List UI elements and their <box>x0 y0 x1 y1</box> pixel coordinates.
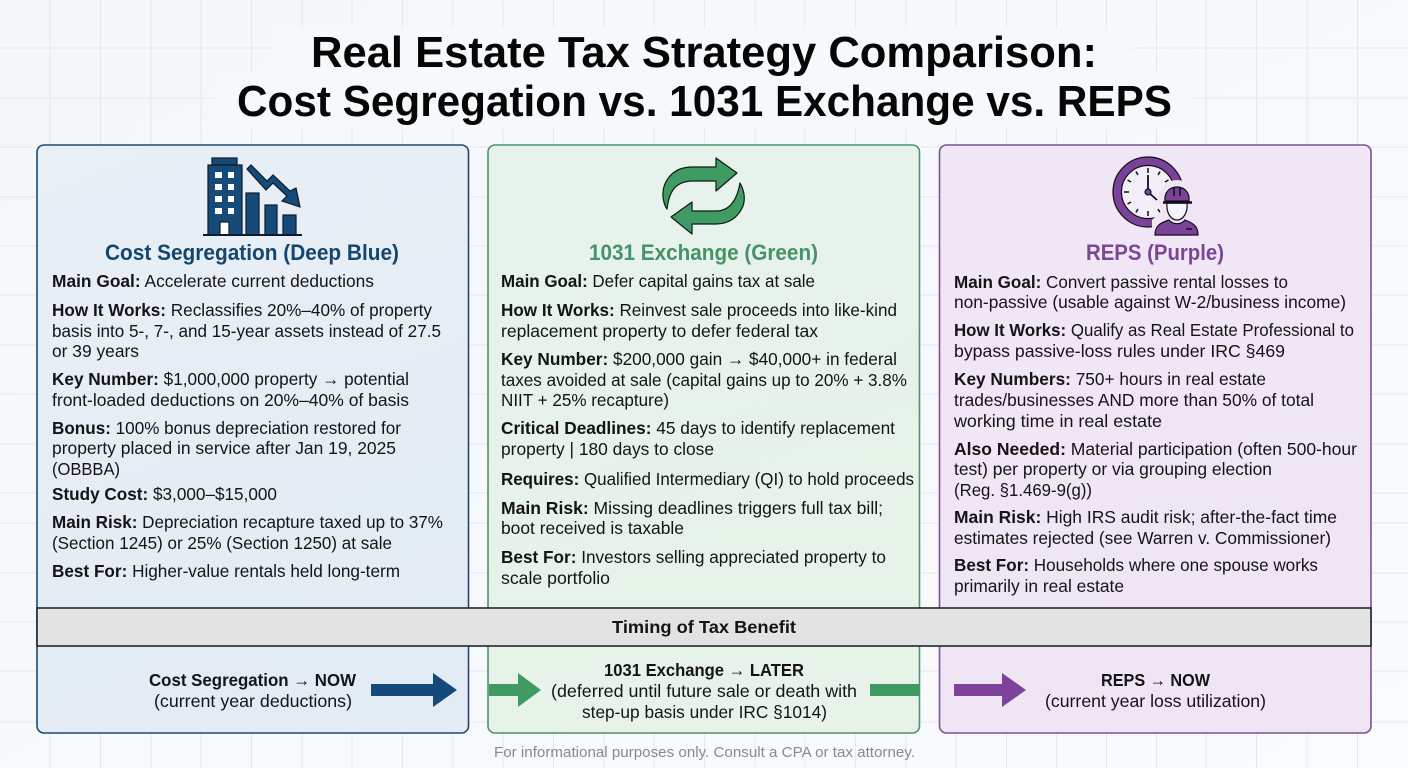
text: how it works: How It Works: Reclassifies 20%–40% of property <box>52 300 432 320</box>
arrow: cost segregation now <box>371 673 457 707</box>
text: main risk: boot received is taxable <box>501 518 684 538</box>
title: Real Estate Tax Strategy Comparison: <box>311 28 1097 77</box>
text: bonus: Bonus: 100% bonus depreciation restored for <box>52 418 401 438</box>
text: main risk: Main Risk: Missing deadlines triggers full tax bill; <box>501 498 883 518</box>
text: main risk <box>954 507 1337 548</box>
timing: cost segregation: Cost Segregation → NOW <box>149 670 356 690</box>
timing: reps <box>1045 670 1266 711</box>
timing: reps: (current year loss utilization) <box>1045 691 1266 711</box>
title <box>237 28 1172 126</box>
text: key number: Key Number: $1,000,000 property → potential <box>52 369 409 389</box>
text: main goal: Main Goal: Accelerate current deductions <box>52 271 374 291</box>
heading: 1031 exchange: 1031 Exchange (Green) <box>589 240 818 265</box>
text: main goal: non-passive (usable against W-2/business income) <box>954 292 1346 312</box>
text: main goal: Main Goal: Defer capital gains tax at sale <box>501 271 815 291</box>
text: key numbers <box>953 369 1314 431</box>
text: how it works: How It Works: Qualify as Real Estate Professional to <box>954 320 1354 340</box>
text: bonus <box>52 418 401 479</box>
text: also needed: (Reg. §1.469-9(g)) <box>954 480 1092 500</box>
text: key numbers: trades/businesses AND more than 50% of total <box>954 390 1314 410</box>
timing of tax benefit bar: Timing of Tax Benefit <box>612 617 796 637</box>
text: how it works: or 39 years <box>52 341 139 361</box>
timing: reps: REPS → NOW <box>1101 670 1210 690</box>
panel: reps <box>940 145 1371 733</box>
arrow: reps now <box>954 673 1026 707</box>
text: best for: Best For: Investors selling appreciated property to <box>501 547 886 567</box>
text: main goal <box>954 272 1346 312</box>
text: also needed <box>954 439 1357 500</box>
timing of tax benefit bar <box>37 608 1371 646</box>
text: best for <box>501 547 886 588</box>
panel: cost segregation <box>37 145 468 733</box>
heading: reps: REPS (Purple) <box>1086 240 1224 265</box>
text: best for: Best For: Higher-value rentals held long-term <box>52 561 400 581</box>
text: key number: front-loaded deductions on 20%–40% of basis <box>52 390 409 410</box>
icon: exchange arrows <box>663 158 744 234</box>
title: Cost Segregation vs. 1031 Exchange vs. REPS <box>237 77 1172 126</box>
text: best for <box>954 555 1318 596</box>
text: how it works: basis into 5-, 7-, and 15-year assets instead of 27.5 <box>52 321 441 341</box>
text: how it works: replacement property to defer federal tax <box>501 321 818 341</box>
text: main risk <box>52 512 443 553</box>
text: best for: scale portfolio <box>501 568 610 588</box>
timing: 1031 exchange: step-up basis under IRC §1014) <box>582 702 827 722</box>
text: how it works <box>954 320 1354 361</box>
arrow: 1031 start <box>489 673 541 707</box>
heading: cost segregation: Cost Segregation (Deep Blue) <box>105 240 399 265</box>
icon: building with falling bar chart <box>203 158 302 235</box>
text: how it works <box>501 300 897 341</box>
text: key number <box>501 349 907 410</box>
text: key numbers: working time in real estate <box>953 411 1162 431</box>
text: how it works: How It Works: Reinvest sale proceeds into like-kind <box>501 300 897 320</box>
text: main goal: Main Goal: Convert passive rental losses to <box>954 272 1288 292</box>
text: best for: primarily in real estate <box>954 576 1124 596</box>
timing: cost segregation <box>149 670 356 711</box>
timing: cost segregation: (current year deductions) <box>154 691 352 711</box>
text: how it works: bypass passive-loss rules under IRC §469 <box>954 341 1285 361</box>
text: critical deadlines: Critical Deadlines: 45 days to identify replacement <box>501 418 895 438</box>
icon: clock and worker <box>1113 157 1198 237</box>
timing: 1031 exchange <box>551 660 857 722</box>
text: bonus: (OBBBA) <box>52 459 120 479</box>
text: key number <box>52 369 409 410</box>
arrow: 1031 deferred bar <box>870 684 919 696</box>
text: main risk <box>501 498 883 538</box>
text: critical deadlines <box>501 418 895 459</box>
text: main risk: Main Risk: High IRS audit risk; after-the-fact time <box>954 507 1337 527</box>
text: main risk: estimates rejected (see Warren v. Commissioner) <box>954 528 1331 548</box>
text: main risk: Main Risk: Depreciation recapture taxed up to 37% <box>52 512 443 532</box>
text: best for: Best For: Households where one spouse works <box>954 555 1318 575</box>
text: how it works <box>52 300 441 361</box>
text: bonus: property placed in service after Jan 19, 2025 <box>52 438 396 458</box>
timing: 1031 exchange: 1031 Exchange → LATER <box>604 660 804 680</box>
text: main risk: (Section 1245) or 25% (Section 1250) at sale <box>52 533 392 553</box>
text: key number: NIIT + 25% recapture) <box>501 390 669 410</box>
text: critical deadlines: property | 180 days to close <box>501 439 714 459</box>
text: study cost: Study Cost: $3,000–$15,000 <box>52 484 277 504</box>
panel: 1031 exchange <box>488 145 920 733</box>
text: key number: Key Number: $200,000 gain → $40,000+ in federal <box>501 349 897 369</box>
timing: 1031 exchange: (deferred until future sale or death with <box>551 681 857 701</box>
text: also needed: test) per property or via grouping election <box>954 459 1272 479</box>
text: also needed: Also Needed: Material participation (often 500-hour <box>954 439 1357 459</box>
footer disclaimer: For informational purposes only. Consult a CPA or tax attorney. <box>494 744 915 761</box>
text: requires: Requires: Qualified Intermediary (QI) to hold proceeds <box>501 469 914 489</box>
text: key number: taxes avoided at sale (capital gains up to 20% + 3.8% <box>501 370 907 390</box>
text: key numbers: Key Numbers: 750+ hours in real estate <box>954 369 1266 389</box>
